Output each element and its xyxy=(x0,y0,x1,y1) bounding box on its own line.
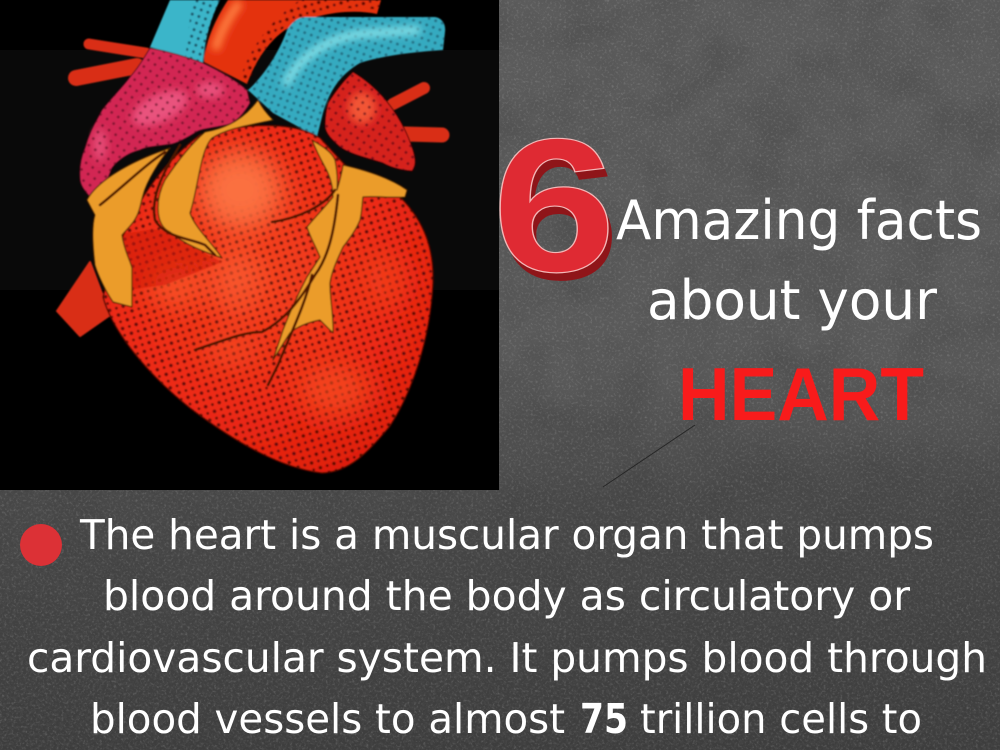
icon: aorta xyxy=(204,0,381,84)
title: Amazing facts xyxy=(616,189,982,252)
icon: pulmonary artery xyxy=(248,17,445,137)
text block: fact one: cardiovascular system. It pumps blood through xyxy=(27,634,987,682)
text block: fact one: 75 xyxy=(580,695,628,743)
icon: right atrium xyxy=(80,48,250,197)
icon: coronary vessel lines xyxy=(100,145,338,385)
bullet dot xyxy=(20,524,62,566)
text block: fact one: blood around the body as circulatory or xyxy=(103,572,910,620)
title keyword: HEART xyxy=(678,352,924,436)
big number 6: 6 xyxy=(496,108,620,320)
text block: fact one: The heart is a muscular organ that pumps xyxy=(79,511,934,559)
panel: heart illustration xyxy=(0,0,499,490)
icon: coronary fat xyxy=(87,100,407,360)
icon: heart muscle xyxy=(90,120,440,480)
title xyxy=(616,189,982,436)
text block: fact one: blood vessels to almost xyxy=(90,695,565,743)
icon: small vessels xyxy=(57,44,442,336)
text block: fact one xyxy=(27,511,987,743)
text block: fact one: trillion cells to xyxy=(640,695,922,743)
icon: anatomical heart xyxy=(57,0,445,480)
icon: superior vena cava xyxy=(150,0,220,63)
icon: left atrium xyxy=(325,72,415,171)
title: about your xyxy=(647,269,938,332)
big number 6: 6 xyxy=(492,100,616,312)
